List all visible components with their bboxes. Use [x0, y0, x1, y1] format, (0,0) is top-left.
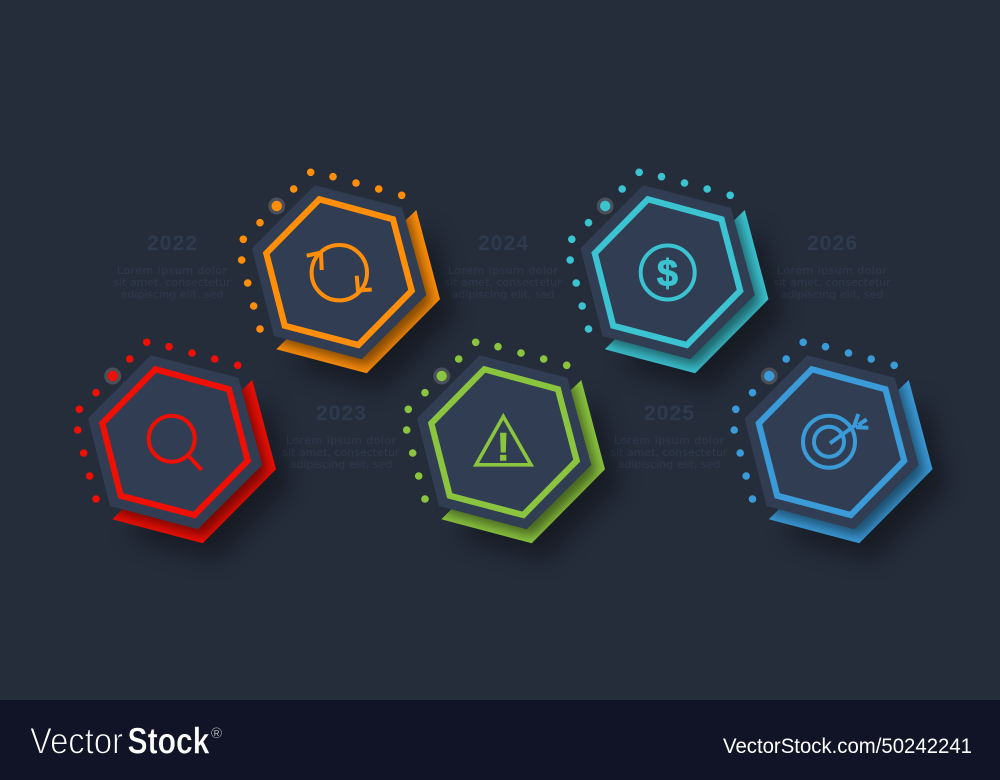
- text block: 2024: adipiscing elit, sed: [452, 288, 554, 301]
- icon: target with arrow: [803, 414, 868, 468]
- text block: 2024: sit amet, consectetur: [444, 276, 562, 289]
- text block: 2026: 2026: [807, 232, 857, 255]
- footer image id: VectorStock.com/50242241: [723, 735, 972, 758]
- text block: 2025: adipiscing elit, sed: [618, 458, 720, 471]
- text block: 2022: adipiscing elit, sed: [121, 288, 223, 301]
- footer bar: [0, 700, 1000, 780]
- icon: warning triangle: !: [497, 425, 510, 469]
- icon: dollar coin: $: [657, 253, 678, 295]
- text block: 2022: 2022: [147, 232, 197, 255]
- footer logo: [30, 720, 222, 762]
- text block: 2022: [113, 232, 231, 301]
- text block: 2025: sit amet, consectetur: [610, 446, 728, 459]
- text block: 2026: Lorem ipsum dolor: [777, 264, 887, 277]
- text block: 2022: sit amet, consectetur: [113, 276, 231, 289]
- text block: 2025: 2025: [644, 402, 694, 425]
- text block: 2024: [444, 232, 562, 301]
- text block: 2025: Lorem ipsum dolor: [614, 434, 724, 447]
- text block: 2023: adipiscing elit, sed: [290, 458, 392, 471]
- text block: 2022: Lorem ipsum dolor: [117, 264, 227, 277]
- icon: warning triangle: [476, 416, 531, 469]
- icon: dollar coin: [641, 246, 695, 300]
- icon: refresh arrows: [307, 245, 372, 300]
- text block: 2024: 2024: [478, 232, 528, 255]
- text block: 2023: [282, 402, 400, 471]
- text block: 2026: sit amet, consectetur: [773, 276, 891, 289]
- footer logo: Stock: [128, 720, 210, 762]
- footer logo: ®: [211, 725, 222, 742]
- footer logo: Vector: [30, 720, 123, 762]
- panel: green hexagon: [403, 338, 620, 560]
- panel: teal hexagon: [566, 168, 784, 390]
- text block: 2026: adipiscing elit, sed: [781, 288, 883, 301]
- panel: red hexagon: [74, 338, 291, 560]
- text block: 2025: [610, 402, 728, 471]
- panel: orange hexagon: [238, 168, 455, 390]
- text block: 2023: sit amet, consectetur: [282, 446, 400, 459]
- text block: 2026: [773, 232, 891, 301]
- panel: blue hexagon: [730, 338, 948, 560]
- text block: 2024: Lorem ipsum dolor: [448, 264, 558, 277]
- icon: magnifying glass: [149, 416, 202, 470]
- text block: 2023: Lorem ipsum dolor: [286, 434, 396, 447]
- text block: 2023: 2023: [316, 402, 366, 425]
